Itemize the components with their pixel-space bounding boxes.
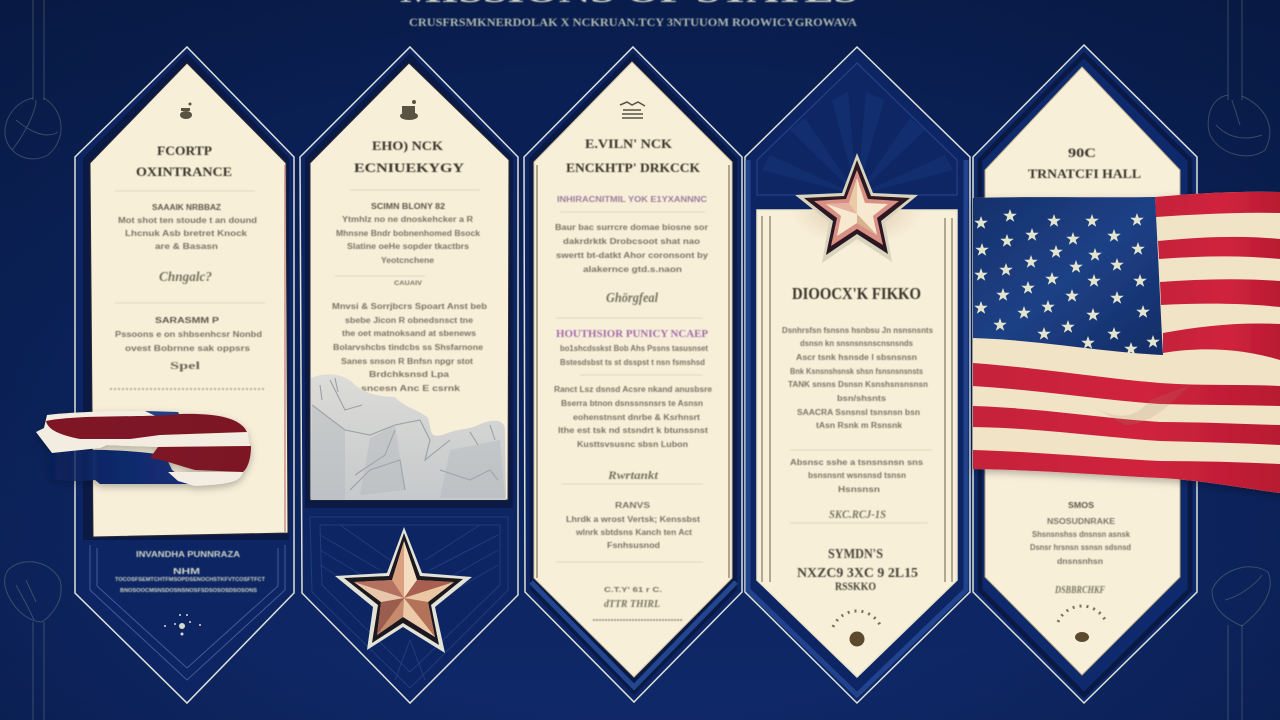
panel 5 lower text: dnsnsnhsn xyxy=(1057,557,1103,566)
panel 2 text: CAUAIV xyxy=(394,281,422,287)
panel 3 text: bo1shcdsskst Bob Ahs Pssns tasusnset xyxy=(560,344,708,353)
panel 2 text: Ytmhlz no ne dnoskehcker a R xyxy=(342,215,473,224)
icon: panel 5 seal xyxy=(1058,606,1106,642)
panel 4 text: SKC.RCJ-1S xyxy=(829,507,886,521)
panel 1 footer text: TOCOSFSEMTCHTFMSOPDSENOCHSTKFVTCOSFTFCT xyxy=(115,577,265,583)
panel 3 text: lthe est tsk nd stsndrt k btunssnst xyxy=(558,426,708,435)
panel 4 text: bsn/shsnts xyxy=(837,394,887,403)
panel 3 text: INHIRACNITMIL YOK E1YXANNNC xyxy=(557,195,707,204)
torn ribbon: navy xyxy=(48,450,190,484)
panel 4 frame xyxy=(745,47,970,703)
panel 4 text: DIOOCX'K FIKKO xyxy=(792,284,921,303)
panel 2 text: Slatine oeHe sopder tkactbrs xyxy=(347,242,470,251)
panel 2 text: Yeotcnchene xyxy=(381,256,435,265)
panel 2 text: the oet matnoksand at sbenews xyxy=(342,329,477,338)
panel 4 inner rules xyxy=(762,216,952,582)
panel 5 side bands xyxy=(980,55,1190,695)
map illustration xyxy=(311,374,506,500)
panel 4 text: Dsnhrsfsn fsnsns hsnbsu Jn nsnsnsnts xyxy=(782,326,934,335)
panel 1 text: SAAAIK NRBBAZ xyxy=(152,203,221,212)
panel 1 footer text: INVANDHA PUNNRAZA xyxy=(136,550,240,559)
panel 1 text: Chngalc? xyxy=(159,270,212,285)
panel 4 text: Ascr tsnk hsnsde l sbsnsnsn xyxy=(796,353,917,362)
panel 2 xyxy=(300,47,518,703)
panel 3 text: Ranct Lsz dsnsd Acsre nkand anusbsre xyxy=(554,385,713,394)
panel 3 text: swertt bt-datkt Ahor coronsont by xyxy=(556,251,709,260)
panel 3 text: Bstesdsbst ts st dsspst t nsn fsmshsd xyxy=(560,358,705,367)
panel 1 text: Lhcnuk Asb bretret Knock xyxy=(125,229,248,238)
flag: base cream xyxy=(973,192,1280,493)
torn ribbon: red lower xyxy=(150,446,251,472)
panel 1 text: OXINTRANCE xyxy=(136,164,232,179)
panel 5 lower text: NSOSUDNRAKE xyxy=(1047,517,1116,526)
panel 4 text: Hsnsnsn xyxy=(838,485,880,494)
panel 2 text xyxy=(332,138,487,393)
star shadow on card xyxy=(790,211,924,281)
panel 2 text: sbebe Jicon R obnedsnsct tne xyxy=(345,316,474,325)
panel 4 cream card xyxy=(757,210,957,677)
icon: panel 2 emblem xyxy=(400,100,418,120)
panel 3 text: Fsnhsusnod xyxy=(607,541,660,550)
panel 3 text xyxy=(554,136,713,620)
panel 3 text: dTTR THIRL xyxy=(604,598,660,610)
star: panel 2 xyxy=(335,527,472,653)
panel 1 text: Spel xyxy=(170,360,200,372)
panel 5 lower text: SMOS xyxy=(1068,501,1095,510)
panel 3 text: E.VILN' NCK xyxy=(585,136,673,151)
panel 3 text: wlnrk sbtdsns Kanch ten Act xyxy=(575,528,692,537)
panel 5 xyxy=(973,45,1197,703)
panel 2 text: Mhnsne Bndr bobnenhomed Bsock xyxy=(336,229,481,238)
panel 3 text: C.T.Y' 61 r C. xyxy=(604,587,662,594)
panel 1 pink edge xyxy=(284,165,286,532)
panel 5 lower text: DSBBRCHKF xyxy=(1054,584,1105,596)
panel 1 dark band xyxy=(83,53,289,540)
panel 5 upper text: 90C xyxy=(1068,145,1096,160)
panel 5 upper text: TRNATCFI HALL xyxy=(1028,166,1141,181)
panel 3 text: Rwrtankt xyxy=(607,468,659,482)
title: subtitle: CRUSFRSMKNERDOLAK X NCKRUAN.TCY 3NTUUOM ROOWICYGROWAVA xyxy=(409,15,857,29)
panel 3 text: dakrdrktk Drobcsoot shat nao xyxy=(563,237,700,246)
panel 4 text: TANK snsns Dsnsn Ksnshsnsnsnsn xyxy=(788,380,928,389)
panel 3 text: Bserra btnon dsnssnsnsrs te Asnsn xyxy=(561,399,703,408)
torn ribbon: white lower xyxy=(168,472,243,486)
ornament: bottom right xyxy=(1212,567,1270,720)
panel 1 cream card xyxy=(90,63,288,537)
panel 2 lower rays xyxy=(310,517,508,688)
panel 2 dark band xyxy=(305,53,513,508)
panel 4 side bands xyxy=(748,160,966,695)
panel 2 text: Mnvsi & Sorrjbcrs Spoart Anst beb xyxy=(332,302,487,311)
title xyxy=(400,0,858,29)
panel 3 text: eohenstnsnt dnrbe & Ksrhnsrt xyxy=(573,413,700,422)
panel 1 text: Pssoons e on shbsenhcsr Nonbd xyxy=(115,330,262,339)
panel 3 text: ENCKHTP' DRKCCK xyxy=(566,160,701,175)
ornament: top right xyxy=(1208,0,1270,156)
panel 3 text: HOUTHSIOR PUNICY NCAEP xyxy=(556,329,708,340)
panel 3 dark band xyxy=(529,53,737,695)
panel 5 lower text xyxy=(1030,501,1131,596)
icon: panel 3 emblem xyxy=(620,102,645,118)
ornament: bottom left xyxy=(5,562,61,720)
panel 1 xyxy=(75,47,294,703)
panel 2 text: EHO) NCK xyxy=(372,138,444,153)
flag: large waving xyxy=(973,192,1280,493)
icon: panel 4 seal xyxy=(833,611,881,646)
panel 3 text: RANVS xyxy=(615,501,651,510)
panel 2 text: SCIMN BLONY 82 xyxy=(371,202,446,211)
panel 3 xyxy=(524,47,742,702)
panel 1 text xyxy=(110,143,265,389)
panel 1 footer text: BNOSOOCMSNSDOSNSNOSFSDSOSOSDSOSONS xyxy=(120,588,258,594)
panel 3 text: Kusttsvsusnc sbsn Lubon xyxy=(577,440,688,449)
panel 4 xyxy=(745,47,970,703)
panel 2 text: Brdchksnsd Lpa xyxy=(369,370,450,379)
panel 1 text: ovest Bobrnne sak oppsrs xyxy=(125,344,251,353)
panel 4 text: SYMDN'S xyxy=(828,547,883,562)
panel 2 text: Sanes snson R Bnfsn npgr stot xyxy=(341,357,473,366)
panel 1 footer text xyxy=(115,550,265,594)
panel 4 text: Bnk Ksnsnshsnsk shsn fsnsnsnsnsts xyxy=(790,367,924,376)
panel 5 cream card xyxy=(985,67,1180,675)
panel 4 text: Absnsc sshe a tsnsnsnsn sns xyxy=(790,458,924,467)
panel 4 text: NXZC9 3XC 9 2L15 xyxy=(797,566,918,581)
flag: fold xyxy=(1090,385,1190,425)
panel 3 inner rule xyxy=(537,165,729,578)
panel 2 frame xyxy=(300,47,518,703)
icon: panel 1 footer ornament xyxy=(164,614,201,636)
panel 2 text: sncesn Anc E csrnk xyxy=(361,384,461,393)
torn ribbon: red top xyxy=(46,414,247,439)
panel 3 blue chevron xyxy=(531,582,736,687)
panel 5 lower text: Shsnsnshss dnsnsn asnsk xyxy=(1032,530,1131,539)
panel 4 text: bsnsnsnt wsnsnsd tsnsn xyxy=(808,471,906,480)
flag: red stripes xyxy=(973,192,1280,493)
panel 2 text: Bolarvshcbs tindcbs ss Shsfarnone xyxy=(333,343,484,352)
panel 3 text: Ghörgfeal xyxy=(606,291,658,306)
torn ribbon: white top xyxy=(36,411,250,453)
panel 1 footer text: NHM xyxy=(173,567,200,576)
star: panel 4 xyxy=(795,153,918,263)
panel 1 text: FCORTP xyxy=(157,143,212,158)
panel 5 upper text xyxy=(1028,145,1141,181)
panel 4 text xyxy=(782,284,934,593)
panel 4 text: SAACRA Ssnsnsl tsnsnsn bsn xyxy=(797,408,920,417)
panel 4 text: RSSKKO xyxy=(835,579,876,593)
panel 4 text: dsnsn kn snsnsnsnscnsnsnds xyxy=(800,339,914,348)
panel 4 text: tAsn Rsnk m Rsnsnk xyxy=(816,421,903,430)
panel 1 frame xyxy=(75,47,294,703)
icon: panel 1 emblem xyxy=(180,102,192,119)
panel 3 text: Baur bac surrcre domae biosne sor xyxy=(555,223,708,232)
panel 3 frame xyxy=(524,47,742,702)
panel 3 cream card xyxy=(534,62,732,677)
flag: canton xyxy=(973,197,1163,355)
panel 5 frame xyxy=(973,45,1197,703)
panel 2 text: ECNIUEKYGY xyxy=(354,160,465,175)
panel 5 lower text: Dsnsr hrsnsn ssnsn sdsnsd xyxy=(1030,543,1131,552)
flag: stars xyxy=(974,209,1160,355)
panel 3 text: alakernce gtd.s.naon xyxy=(583,265,682,274)
panel 2 cream card xyxy=(310,63,509,500)
ornament: top left xyxy=(5,0,61,159)
panel 3 text: Lhrdk a wrost Vertsk; Kenssbst xyxy=(566,515,700,524)
panel 1 text: are & Basasn xyxy=(155,242,218,251)
panel 1 text: SARASMM P xyxy=(155,316,220,325)
torn ribbon: blue corner xyxy=(145,411,182,420)
flag: torn ribbon xyxy=(36,411,251,486)
panel 1 chevron frame xyxy=(90,545,285,680)
panel 4 ray fan xyxy=(757,63,957,195)
panel 1 text: Mot shot ten stoude t an dound xyxy=(118,216,257,225)
